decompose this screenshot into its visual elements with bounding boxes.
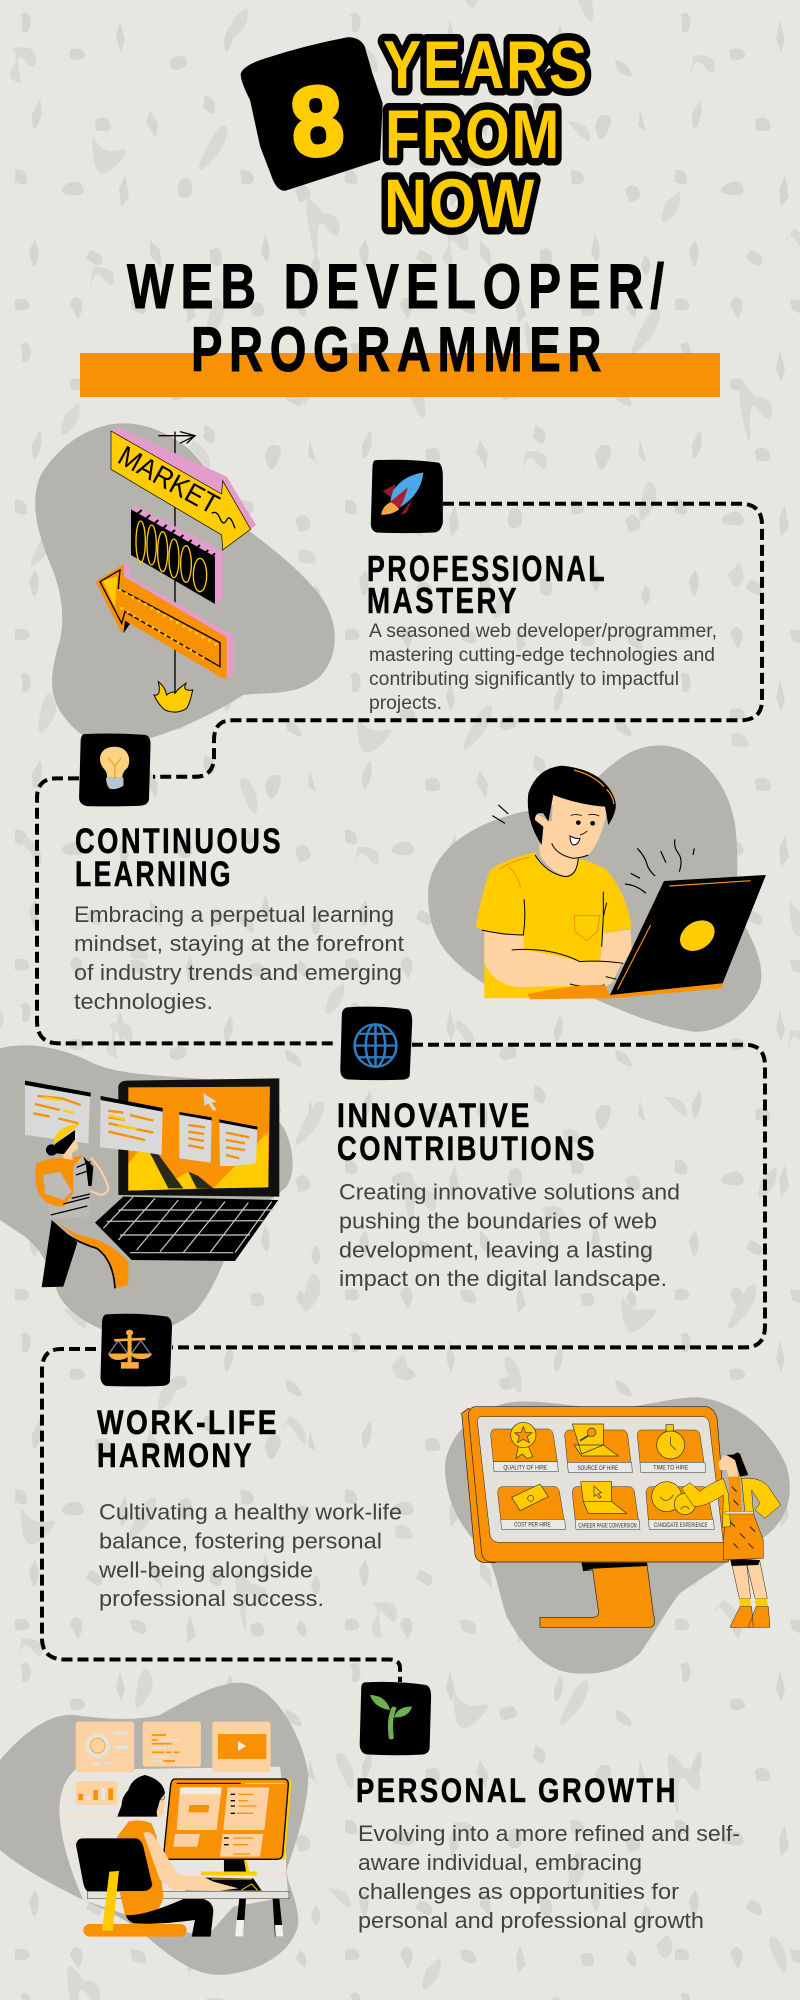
illustration: woman at desk [0, 1683, 308, 1975]
heading: PROFESSIONAL [367, 548, 607, 589]
word: from: FROM [385, 96, 561, 173]
text block: contributing significantly to impactful [369, 669, 679, 690]
number 8: 8 [286, 64, 348, 178]
presenter [732, 1562, 767, 1598]
text block: Embracing a perpetual learning [74, 902, 394, 927]
heading [75, 822, 283, 894]
heading: INNOVATIVE [337, 1097, 532, 1135]
panel: innovative contributions [0, 1007, 680, 1335]
text block: challenges as opportunities for [358, 1879, 679, 1904]
card captions: CANDIDATE EXPERIENCE [654, 1522, 708, 1529]
header: 8 years from now [241, 27, 589, 242]
text block [339, 1180, 680, 1291]
panel: personal growth [0, 1682, 740, 1975]
heading [97, 1404, 279, 1475]
floating cards [25, 1082, 257, 1166]
heading: HARMONY [97, 1437, 254, 1475]
text block [358, 1821, 740, 1933]
dashboard cards [491, 1429, 713, 1519]
text block: Cultivating a healthy work-life [99, 1500, 402, 1524]
heading [367, 548, 607, 621]
text block: A seasoned web developer/programmer, [369, 621, 717, 642]
text block: balance, fostering personal [99, 1528, 382, 1554]
text block: Creating innovative solutions and [339, 1180, 680, 1204]
text block: Evolving into a more refined and self- [358, 1821, 740, 1846]
text block [369, 621, 717, 714]
panel: professional mastery [35, 423, 717, 744]
text block: technologies. [74, 989, 213, 1014]
heading: MASTERY [367, 580, 519, 621]
illustration: market sign: MARKET [113, 440, 224, 520]
card captions: TIME TO HIRE [653, 1464, 689, 1471]
text block [74, 902, 404, 1014]
text block: well-being alongside [98, 1558, 313, 1582]
text block: personal and professional growth [358, 1908, 704, 1933]
heading: CONTINUOUS [75, 822, 283, 861]
word: now: NOW [384, 165, 536, 242]
text block: professional success. [99, 1586, 324, 1611]
icon: sprout [360, 1682, 431, 1755]
title [80, 252, 720, 397]
card icons [511, 1422, 696, 1515]
icon: scales [101, 1314, 172, 1386]
seated woman [47, 1157, 93, 1218]
text block: mastering cutting-edge technologies and [369, 645, 715, 666]
text block: development, leaving a lasting [339, 1238, 653, 1262]
panel: continuous learning [74, 734, 766, 1032]
text block: pushing the boundaries of web [339, 1208, 657, 1234]
illustration: boy with laptop [428, 745, 766, 1032]
laptop keyboard [95, 1197, 278, 1261]
word: years: YEARS [383, 27, 589, 103]
illustration: market sign [35, 423, 335, 744]
text block [98, 1500, 402, 1611]
panel: work-life harmony [97, 1314, 790, 1674]
text block: impact on the digital landscape. [339, 1266, 667, 1291]
connector: dashed path [37, 504, 765, 1682]
icon: globe [340, 1007, 412, 1080]
text block: aware individual, embracing [358, 1850, 642, 1875]
heading: CONTRIBUTIONS [337, 1130, 597, 1168]
orange title bar [80, 353, 720, 397]
heading [337, 1097, 597, 1168]
card captions: QUALITY OF HIRE [503, 1464, 548, 1471]
card captions: CAREER PAGE CONVERSION [578, 1522, 637, 1529]
text block: mindset, staying at the forefront [74, 931, 404, 956]
text block: projects. [369, 693, 442, 714]
heading: LEARNING [75, 855, 233, 894]
card captions: COST PER HIRE [514, 1522, 551, 1529]
heading: PERSONAL GROWTH [356, 1772, 678, 1810]
icon: rocket [371, 460, 443, 533]
black tilted badge [241, 37, 383, 191]
heading: WORK-LIFE [97, 1404, 279, 1442]
text block: of industry trends and emerging [74, 960, 402, 985]
title line 2: PROGRAMMER [191, 315, 608, 385]
card captions [503, 1464, 708, 1529]
illustration: dashboard monitor [445, 1397, 790, 1674]
illustration: woman at laptop [0, 1045, 293, 1335]
card captions: SOURCE OF HIRE [577, 1465, 619, 1472]
icon: light bulb [79, 734, 151, 806]
